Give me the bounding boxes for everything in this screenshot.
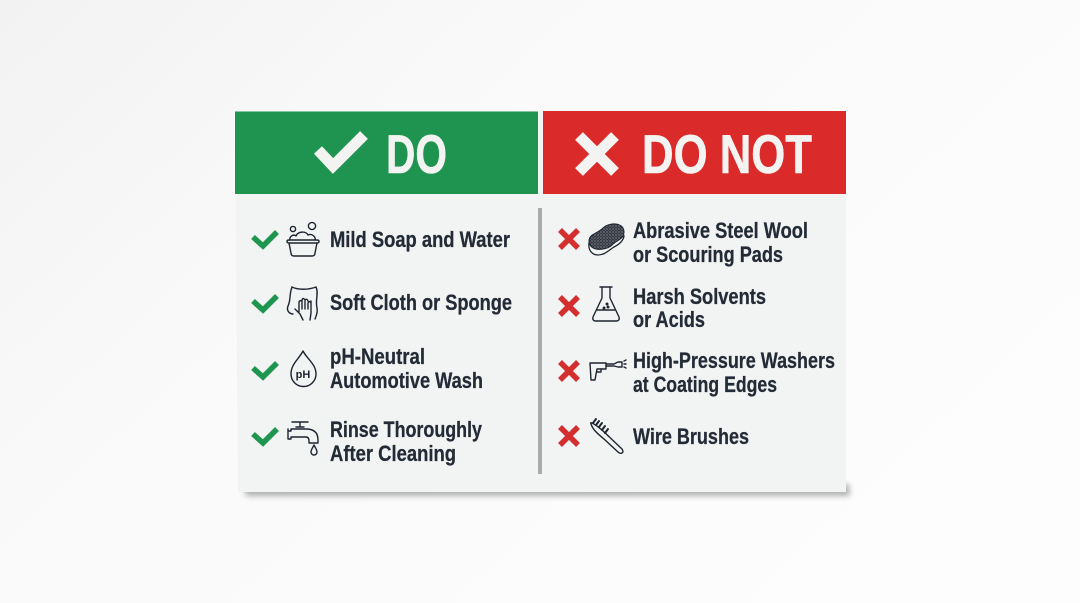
label: Abrasive Steel Wool [633, 218, 808, 243]
item: ph-neutral automotive wash: Automotive Wash [330, 368, 483, 393]
icon: large x [579, 136, 615, 172]
header: do not [543, 111, 846, 194]
label: High-Pressure Washers [633, 348, 835, 373]
heading: do: DO [386, 123, 447, 185]
label: pH-Neutral [330, 344, 425, 369]
column divider [538, 208, 542, 474]
icon: hand with cloth [287, 287, 317, 320]
icon: flask [593, 287, 619, 321]
icon: scouring pad [589, 224, 624, 255]
item: harsh solvents or acids [560, 284, 766, 332]
item: soft cloth or sponge [253, 287, 512, 320]
card [235, 111, 850, 496]
icon: ph drop: pH [296, 369, 310, 381]
item: high-pressure washers [560, 348, 835, 397]
item: abrasive steel wool [560, 218, 808, 267]
header: do [235, 112, 538, 194]
label: Mild Soap and Water [330, 227, 510, 252]
item: wire brushes [560, 419, 749, 453]
item: mild soap and water [253, 222, 510, 256]
label: Rinse Thoroughly [330, 417, 483, 442]
icon: wire brush [591, 419, 623, 453]
icon: faucet [288, 422, 318, 455]
item: rinse thoroughly after cleaning: After Cleaning [330, 441, 456, 466]
label: Wire Brushes [633, 424, 749, 449]
icon: soap basin [287, 222, 319, 256]
item: abrasive steel wool: or Scouring Pads [633, 242, 783, 267]
label: Soft Cloth or Sponge [330, 290, 512, 315]
item: rinse thoroughly after cleaning [253, 417, 483, 466]
item: high-pressure washers: at Coating Edges [633, 372, 777, 397]
icon: ph drop [291, 351, 316, 386]
icon: large check [318, 135, 364, 166]
label: Harsh Solvents [633, 284, 766, 309]
item: ph-neutral automotive wash [253, 344, 483, 393]
item: harsh solvents or acids: or Acids [633, 307, 705, 332]
heading: do not: DO NOT [642, 123, 812, 185]
icon: pressure washer gun [590, 360, 626, 380]
